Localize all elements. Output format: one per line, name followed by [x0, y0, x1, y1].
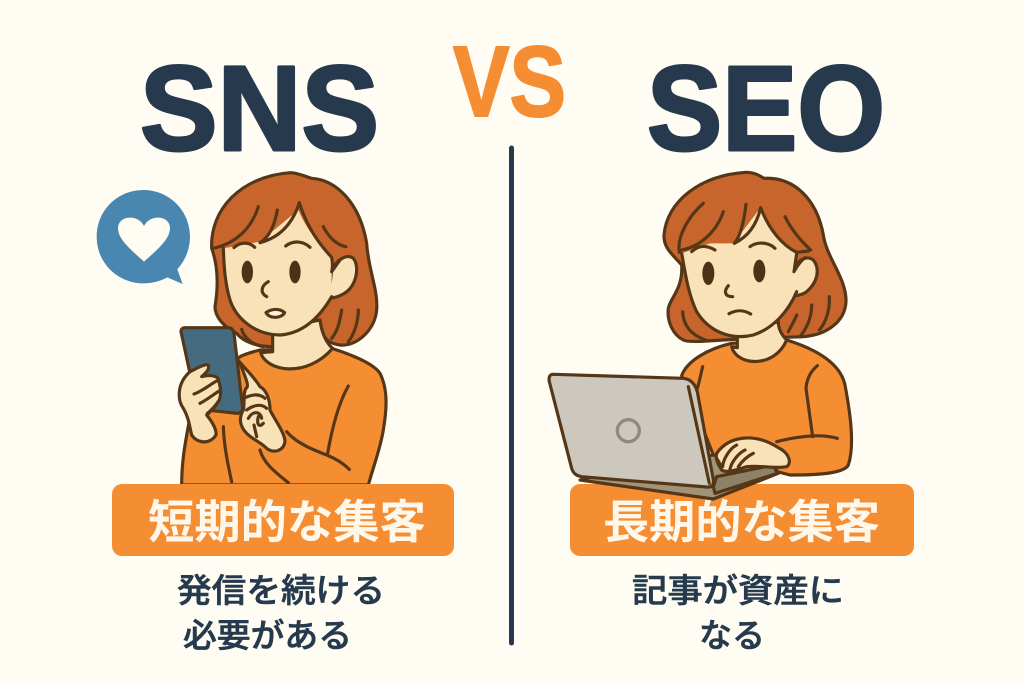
ear [328, 257, 357, 298]
sweater lines [697, 366, 837, 442]
sweater [182, 348, 386, 485]
label: long-term: 長期的な集客 [603, 486, 880, 552]
text: SEO description [632, 564, 844, 657]
laptop logo [617, 420, 639, 442]
laptop lid [549, 374, 713, 487]
hair [664, 172, 846, 341]
face [223, 210, 332, 335]
eyes, brows, nose, mouth [702, 262, 714, 285]
sleeve lines [223, 386, 349, 483]
phone [181, 328, 243, 413]
center divider [509, 148, 514, 643]
illustration: woman with laptop [549, 172, 852, 499]
icon: heart speech bubble [97, 190, 190, 284]
hand [716, 438, 789, 471]
text: SNS description: 発信を続ける [177, 564, 385, 612]
neck [261, 320, 333, 369]
heading: SEO: SEO [647, 40, 885, 176]
bangs [679, 203, 811, 272]
heading: VS: VS [453, 26, 566, 138]
bangs [213, 203, 346, 272]
laptop base [580, 455, 778, 499]
right hand [239, 362, 285, 451]
left hand [179, 365, 221, 442]
text: SNS description: 必要がある [183, 609, 352, 657]
heading: SNS: SNS [140, 40, 379, 176]
hair back [212, 173, 377, 347]
illustration: woman with smartphone [179, 173, 386, 485]
neck [732, 322, 787, 362]
text: SNS description [177, 564, 385, 657]
text: SEO description: 記事が資産に [632, 564, 844, 612]
face [682, 208, 797, 337]
ear [790, 258, 817, 296]
label: short-term: 短期的な集客 [148, 486, 426, 552]
sweater [682, 340, 852, 475]
text: SEO description: なる [699, 609, 765, 657]
eyes, brows, nose, mouth [242, 261, 253, 283]
